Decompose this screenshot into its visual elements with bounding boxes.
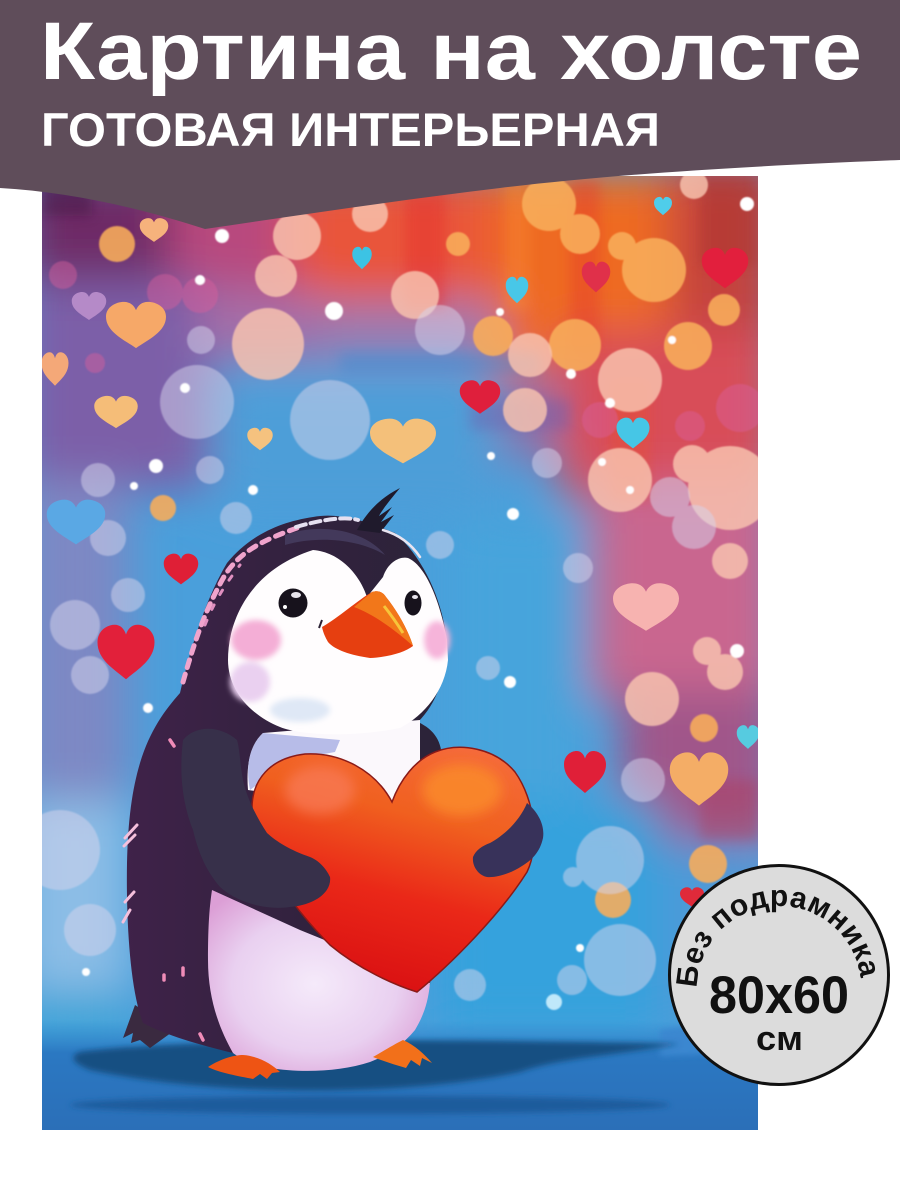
chest <box>248 720 420 800</box>
painting background <box>20 160 780 1130</box>
vertical paint streaks <box>42 176 758 840</box>
header banner <box>0 0 900 229</box>
cheeks <box>230 620 450 722</box>
left flipper <box>181 729 330 908</box>
right eye <box>404 590 422 616</box>
feather speckles <box>123 518 420 1040</box>
small hearts <box>42 197 759 907</box>
badge size: 80x60 <box>709 966 849 1025</box>
bokeh lights <box>20 171 772 1010</box>
water and ground shadow <box>42 1018 758 1130</box>
painting: penguin with heart <box>20 160 780 1130</box>
size badge <box>668 864 890 1086</box>
head sheen <box>285 529 385 555</box>
heart highlights <box>285 764 502 816</box>
chest shadow <box>248 733 340 790</box>
title: Картина на холсте <box>40 6 862 97</box>
tail feathers <box>123 1005 169 1048</box>
left eye <box>278 588 308 618</box>
left foot <box>208 1055 280 1079</box>
belly <box>208 890 430 1071</box>
beak <box>322 591 413 658</box>
badge unit: см <box>756 1020 803 1058</box>
penguin <box>123 488 543 1079</box>
big heart <box>252 747 534 992</box>
face <box>228 550 448 734</box>
right foot <box>373 1040 432 1068</box>
subtitle: ГОТОВАЯ ИНТЕРЬЕРНАЯ <box>41 104 660 157</box>
penguin body <box>127 516 446 1053</box>
badge arc text: Без подрамника <box>676 890 876 986</box>
right flipper <box>473 803 543 877</box>
penguin crest <box>357 488 400 533</box>
smile <box>319 620 322 628</box>
